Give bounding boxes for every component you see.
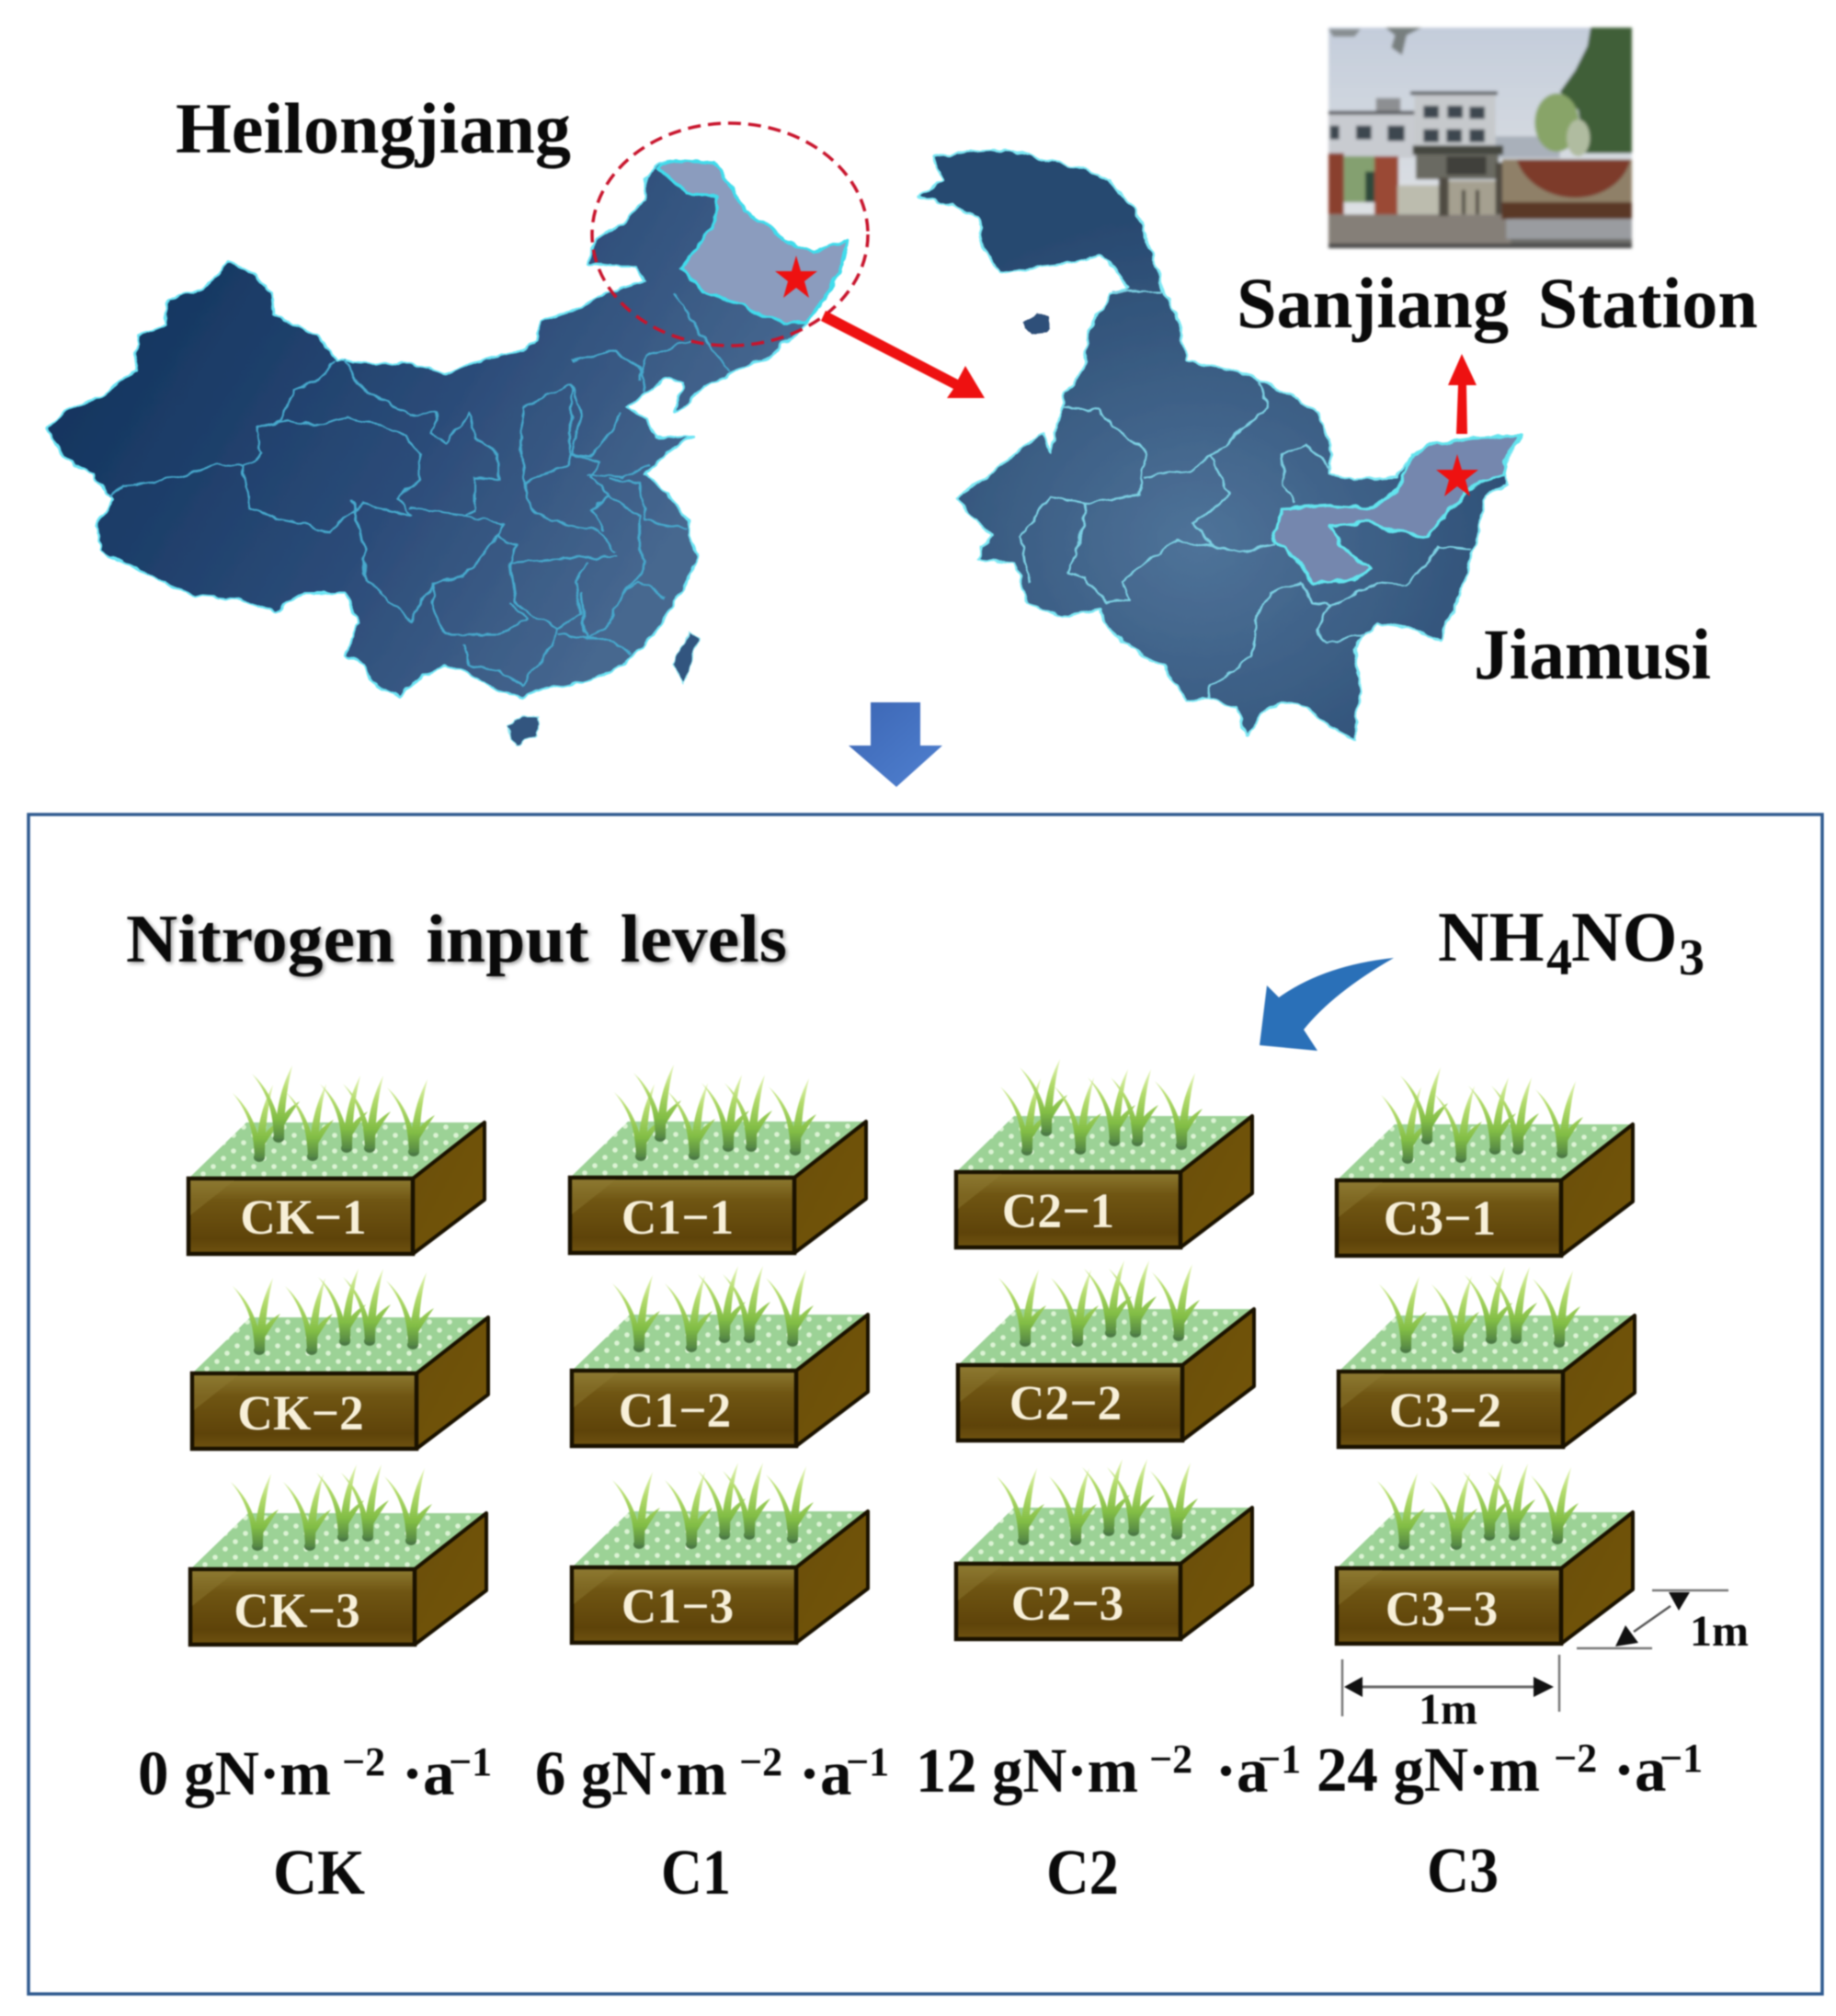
- Heilongjiang outline: [918, 150, 1521, 740]
- panel border: [29, 814, 1822, 1994]
- heading: Nitrogen input levels: Nitrogen input levels: [126, 902, 787, 977]
- treatment: CK: CK: [273, 1838, 365, 1908]
- rate label: C3: −2: [1554, 1736, 1597, 1781]
- rate label: C2: −2: [1149, 1737, 1192, 1782]
- rate label: CK: −2: [342, 1739, 385, 1784]
- treatment: C3: C3: [1427, 1836, 1499, 1907]
- Taiwan island: [673, 632, 698, 683]
- rate label: C3: ·a: [1614, 1735, 1667, 1805]
- prefecture borders: [1021, 291, 1470, 699]
- province borders: [108, 294, 730, 686]
- treatment: C2: C2: [1046, 1838, 1119, 1908]
- label: NH4NO3: NO: [1571, 897, 1677, 976]
- Heilongjiang highlight: [657, 160, 848, 323]
- photo: Sanjiang Station: [1329, 28, 1632, 248]
- title: Heilongjiang: Heilongjiang: [176, 88, 571, 168]
- label: Jiamusi: Jiamusi: [1474, 614, 1711, 694]
- arrow: down to experiment panel: [849, 702, 942, 787]
- rate label: C3: −1: [1659, 1736, 1703, 1781]
- rate label: C1: ·a: [799, 1738, 852, 1808]
- plot C3-2: [1339, 1267, 1635, 1447]
- small island: [1023, 312, 1050, 335]
- plot C2-3: C2−3: [1011, 1576, 1123, 1631]
- label: NH4NO3: NH: [1438, 897, 1545, 976]
- plot C3-3: C3−3: [1386, 1581, 1498, 1636]
- plot C2-3: [956, 1459, 1252, 1639]
- plot C1-2: [572, 1266, 868, 1446]
- rate label: C1: 6 gN·m: [535, 1738, 727, 1808]
- rate label: C2: −1: [1258, 1737, 1301, 1782]
- label: Sanjiang Station: Sanjiang Station: [1237, 263, 1758, 343]
- rate label: C3: 24 gN·m: [1317, 1735, 1540, 1805]
- plot C1-1: [570, 1065, 866, 1253]
- Hainan island: [506, 717, 539, 746]
- map: Heilongjiang: [918, 150, 1521, 740]
- plot C2-2: [958, 1260, 1254, 1441]
- plot C1-1: C1−1: [622, 1190, 734, 1245]
- star: Sanjiang Station location: [1436, 454, 1478, 496]
- dimension: depth 1m: 1m: [1690, 1607, 1749, 1656]
- plot C2-1: C2−1: [1002, 1183, 1114, 1238]
- map: China: [47, 160, 848, 746]
- dimension: depth 1m: [1577, 1590, 1749, 1656]
- plot C2-1: [956, 1059, 1252, 1247]
- arrow: to Sanjiang Station: [1448, 354, 1477, 434]
- plot CK-1: CK−1: [240, 1190, 367, 1245]
- plot CK-2: [192, 1269, 488, 1449]
- rate label: CK: −1: [449, 1739, 492, 1784]
- plot CK-1: [188, 1065, 485, 1254]
- rate label: C2: 12 gN·m: [916, 1736, 1138, 1805]
- dashed circle: [592, 123, 868, 346]
- rate label: C1: −1: [846, 1739, 889, 1784]
- rate label: CK: ·a: [402, 1738, 455, 1808]
- plot C2-2: C2−2: [1009, 1375, 1122, 1430]
- plot C1-3: C1−3: [622, 1578, 734, 1634]
- label: NH4NO3: 3: [1679, 929, 1705, 986]
- star: Heilongjiang location: [775, 256, 817, 298]
- plot C1-2: C1−2: [619, 1383, 731, 1438]
- rate label: C1: −2: [739, 1739, 782, 1784]
- plot C3-1: [1337, 1067, 1633, 1256]
- plot C1-3: [572, 1463, 868, 1643]
- arrow: China to Heilongjiang: [821, 311, 985, 398]
- plot CK-3: [190, 1464, 486, 1645]
- plot C3-2: C3−2: [1389, 1383, 1501, 1438]
- plot C3-3: [1337, 1464, 1633, 1644]
- label: NH4NO3: 4: [1546, 929, 1572, 986]
- plot CK-2: CK−2: [237, 1385, 364, 1441]
- rate label: C2: ·a: [1215, 1736, 1269, 1805]
- rate label: CK: 0 gN·m: [138, 1738, 331, 1808]
- treatment: C1: C1: [661, 1838, 731, 1908]
- China outline: [47, 160, 848, 696]
- dimension: width 1m: [1342, 1655, 1559, 1734]
- arrow: fertilizer input: [1260, 958, 1394, 1051]
- plot C3-1: C3−1: [1384, 1190, 1496, 1246]
- Jiamusi highlight: [1273, 436, 1521, 583]
- plot CK-3: CK−3: [234, 1583, 360, 1638]
- panel: nitrogen input experiment: [29, 814, 1822, 1994]
- dimension: width 1m: 1m: [1419, 1685, 1477, 1734]
